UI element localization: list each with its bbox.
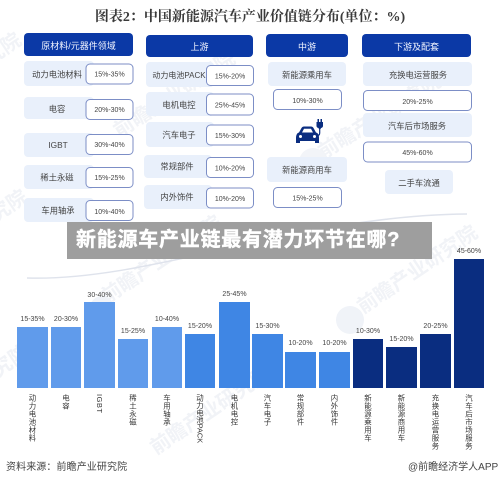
row: battery materials <box>24 61 133 86</box>
row: interior and exterior trim: 内外饰件 <box>160 192 194 202</box>
panel: midstream <box>266 34 348 208</box>
row: used car circulation: 二手车流通 <box>398 178 440 188</box>
value: passenger vehicles <box>274 90 342 110</box>
row: battery materials: 动力电池材料 <box>32 70 83 80</box>
value: charging and swapping: 20%-25% <box>402 99 433 106</box>
row: common parts: 常规部件 <box>160 162 194 172</box>
category axis labels: 充换电运营服务 <box>431 394 440 451</box>
value: aftermarket services: 45%-60% <box>402 150 433 157</box>
row: commercial vehicles <box>267 157 347 182</box>
row: bearings: 10%-40% <box>94 209 125 216</box>
heading: raw materials <box>24 33 133 56</box>
source note: 资料来源：前瞻产业研究院 <box>6 460 127 473</box>
row: motor control: 电机电控 <box>162 100 196 110</box>
row: IGBT <box>24 133 133 157</box>
category axis labels <box>28 394 473 451</box>
text: 前瞻产业研究院 <box>109 46 239 142</box>
row: IGBT: 30%-40% <box>94 142 125 149</box>
row: passenger vehicles: 新能源乘用车 <box>282 70 332 80</box>
category axis labels: 车用轴承 <box>162 394 172 426</box>
bar value labels: 20-25% <box>423 323 448 330</box>
category axis labels: 新能源商用车 <box>397 394 406 443</box>
bar value labels: 30-40% <box>87 292 112 299</box>
banner: 新能源车产业链最有潜力环节在哪? <box>76 227 400 251</box>
bars: midstream and downstream <box>353 259 484 388</box>
bar value labels: 10-20% <box>322 340 347 347</box>
bar value labels <box>20 248 481 347</box>
bar value labels: 45-60% <box>457 248 481 255</box>
heading: raw materials: 原材料/元器件领域 <box>41 40 116 51</box>
text: 前瞻产业研究院 <box>352 220 482 318</box>
value: commercial vehicles <box>274 188 342 208</box>
row: commercial vehicles: 新能源商用车 <box>282 165 332 175</box>
category axis labels: IGBT <box>95 394 104 414</box>
row: motor control: 25%-45% <box>215 102 245 110</box>
row: common parts: 10%-20% <box>215 166 245 172</box>
bar value labels: 15-20% <box>188 323 212 330</box>
row: capacitors: 电容 <box>49 104 65 114</box>
bar value labels: 10-40% <box>155 316 179 323</box>
row: interior and exterior trim: 10%-20% <box>215 196 245 203</box>
row: used car circulation <box>385 170 453 194</box>
bar value labels: 20-30% <box>54 316 78 323</box>
row: capacitors <box>24 97 133 120</box>
row: rare earth magnets: 15%-25% <box>94 175 125 182</box>
brand credit: @前瞻经济学人APP <box>408 460 498 473</box>
row: motor control <box>146 92 254 116</box>
row: battery pack: 15%-20% <box>215 74 245 80</box>
bar value labels: 15-25% <box>121 328 145 335</box>
bar value labels: 15-30% <box>255 323 280 330</box>
category axis labels: 汽车电子 <box>263 394 272 426</box>
category axis labels: 动力电池材料 <box>28 394 37 443</box>
bar value labels: 15-20% <box>389 336 414 343</box>
heading: upstream: 上游 <box>190 41 209 52</box>
category axis labels: 电机电控 <box>230 394 239 427</box>
banner <box>67 222 432 259</box>
heading: upstream <box>146 35 253 57</box>
row: IGBT: IGBT <box>48 140 68 150</box>
row: charging and swapping: 充换电运营服务 <box>389 70 447 80</box>
category axis labels: 内外饰件 <box>330 394 339 427</box>
row: battery pack <box>146 62 254 87</box>
row: passenger vehicles <box>268 62 346 86</box>
row: charging and swapping <box>363 62 472 86</box>
category axis labels: 新能源乘用车 <box>363 394 372 443</box>
row: rare earth magnets: 稀土永磁 <box>40 172 74 182</box>
row: interior and exterior trim <box>144 185 254 209</box>
heading: downstream <box>362 34 471 57</box>
panel: raw materials and components <box>24 33 133 222</box>
panel: downstream and supporting services <box>362 34 472 194</box>
row: common parts <box>144 155 254 178</box>
heading: midstream <box>266 34 348 57</box>
text: 前瞻产业研究院 <box>314 69 445 163</box>
heading: downstream: 下游及配套 <box>394 41 439 52</box>
category axis labels: 稀土永磁 <box>128 394 138 426</box>
category axis labels: 动力电池PACK <box>195 394 204 443</box>
row: battery pack: 动力电池PACK <box>152 70 206 80</box>
row: battery materials: 15%-35% <box>94 72 125 78</box>
row: auto electronics <box>146 122 254 147</box>
bar chart <box>17 248 484 451</box>
row: auto electronics: 汽车电子 <box>162 130 196 140</box>
bars: materials and components <box>17 302 182 388</box>
category axis labels: 汽车后市场服务 <box>464 394 474 451</box>
icon: electric car with charging plug <box>296 119 323 143</box>
row: rare earth magnets <box>24 165 133 189</box>
panel: upstream <box>144 35 254 209</box>
text: 前瞻产业研究院 <box>145 361 275 459</box>
row: bearings <box>24 198 133 222</box>
value: commercial vehicles: 15%-25% <box>292 196 323 202</box>
value: aftermarket services <box>364 142 472 162</box>
row: aftermarket services: 汽车后市场服务 <box>388 121 446 131</box>
row: aftermarket services <box>363 113 472 137</box>
bar value labels: 10-30% <box>356 328 380 335</box>
value: passenger vehicles: 10%-30% <box>292 98 323 105</box>
category axis labels: 常规部件 <box>296 394 305 427</box>
bars: upstream <box>185 302 350 388</box>
bar value labels: 25-45% <box>222 291 247 298</box>
category axis labels: 电容 <box>61 394 70 411</box>
title: 图表2：中国新能源汽车产业价值链分布(单位：%) <box>95 8 405 25</box>
text: 前瞻产业研究院 <box>96 210 226 308</box>
bar value labels: 15-35% <box>20 316 45 323</box>
heading: midstream: 中游 <box>298 41 316 52</box>
row: bearings: 车用轴承 <box>41 206 75 216</box>
value: charging and swapping <box>364 90 472 110</box>
row: capacitors: 20%-30% <box>94 107 125 114</box>
row: auto electronics: 15%-30% <box>215 133 245 140</box>
bar value labels: 10-20% <box>288 340 313 347</box>
